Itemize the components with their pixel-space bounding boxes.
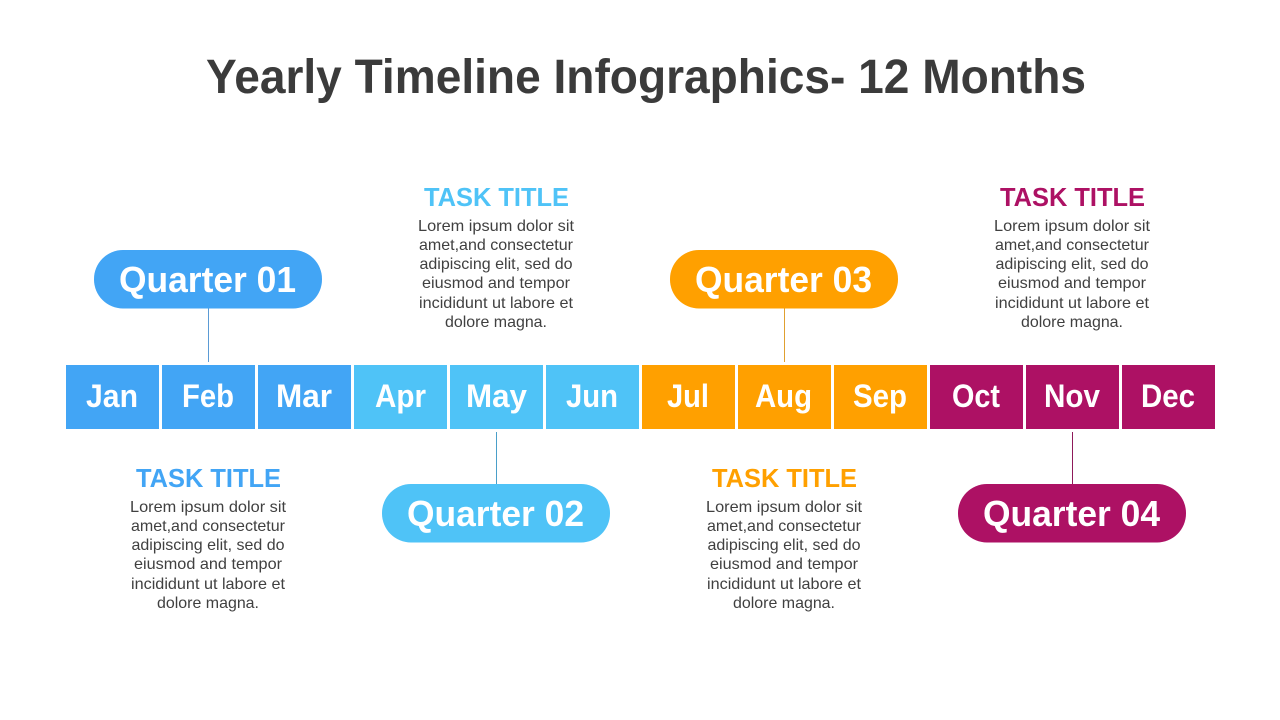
task block: Q4: adipiscing elit, sed do	[996, 256, 1149, 273]
month: Sep: Sep	[853, 378, 907, 414]
quarter 02 callout	[382, 432, 610, 542]
month: Jul	[642, 365, 735, 429]
task block: Q3	[706, 463, 863, 612]
quarter 04 callout: Quarter 04	[983, 493, 1160, 534]
month: Feb	[162, 365, 255, 429]
task block: Q2: incididunt ut labore et	[419, 295, 574, 312]
month: Jun	[546, 365, 639, 429]
task block: Q4: amet,and consectetur	[995, 237, 1150, 254]
task block: Q2: eiusmod and tempor	[422, 275, 571, 292]
task block: Q1: Lorem ipsum dolor sit	[130, 499, 287, 516]
task block: Q3: TASK TITLE	[712, 463, 857, 493]
quarter 02 callout: Quarter 02	[407, 493, 584, 534]
month: Nov: Nov	[1044, 378, 1100, 414]
task block: Q3: amet,and consectetur	[707, 518, 862, 535]
task block: Q3: Lorem ipsum dolor sit	[706, 499, 863, 516]
task block: Q1: dolore magna.	[157, 595, 259, 612]
task block: Q2: adipiscing elit, sed do	[420, 256, 573, 273]
task block: Q1: incididunt ut labore et	[131, 576, 286, 593]
task block: Q4: TASK TITLE	[1000, 182, 1145, 212]
task block: Q1: amet,and consectetur	[131, 518, 286, 535]
month: Apr: Apr	[375, 378, 426, 414]
task block: Q2: amet,and consectetur	[419, 237, 574, 254]
quarter 03 callout: Quarter 03	[695, 259, 872, 300]
task block: Q2	[418, 182, 575, 331]
task block: Q4: eiusmod and tempor	[998, 275, 1147, 292]
task block: Q3: eiusmod and tempor	[710, 556, 859, 573]
quarter 01 callout: Quarter 01	[119, 259, 296, 300]
month: Mar: Mar	[276, 378, 332, 414]
month: Dec	[1122, 365, 1215, 429]
quarter 01 callout	[94, 250, 322, 362]
timeline: month bar	[66, 365, 1215, 429]
month: Jul: Jul	[667, 378, 709, 414]
task block: Q2: TASK TITLE	[424, 182, 569, 212]
quarter 03 callout	[670, 250, 898, 362]
month: Mar	[258, 365, 351, 429]
task block: Q3: incididunt ut labore et	[707, 576, 862, 593]
month: Sep	[834, 365, 927, 429]
month: Nov	[1026, 365, 1119, 429]
month: Aug: Aug	[755, 378, 812, 414]
task block: Q4: Lorem ipsum dolor sit	[994, 218, 1151, 235]
month: Dec: Dec	[1141, 378, 1195, 414]
month: Oct	[930, 365, 1023, 429]
task block: Q1: TASK TITLE	[136, 463, 281, 493]
task block: Q2: dolore magna.	[445, 314, 547, 331]
task block: Q1: eiusmod and tempor	[134, 556, 283, 573]
task block: Q1: adipiscing elit, sed do	[132, 537, 285, 554]
task block: Q4: incididunt ut labore et	[995, 295, 1150, 312]
month: Oct: Oct	[952, 378, 1000, 414]
task block: Q3: dolore magna.	[733, 595, 835, 612]
month: Feb: Feb	[182, 378, 234, 414]
month: Jan	[66, 365, 159, 429]
month: Apr	[354, 365, 447, 429]
month: Jun: Jun	[566, 378, 618, 414]
quarter 04 callout	[958, 432, 1186, 542]
task block: Q3: adipiscing elit, sed do	[708, 537, 861, 554]
month: May	[450, 365, 543, 429]
task block: Q4: dolore magna.	[1021, 314, 1123, 331]
title: Yearly Timeline Infographics- 12 Months	[206, 51, 1086, 104]
task block: Q2: Lorem ipsum dolor sit	[418, 218, 575, 235]
month: Jan: Jan	[86, 378, 138, 414]
task block: Q1	[130, 463, 287, 612]
task block: Q4	[994, 182, 1151, 331]
month: Aug	[738, 365, 831, 429]
month: May: May	[466, 378, 527, 414]
